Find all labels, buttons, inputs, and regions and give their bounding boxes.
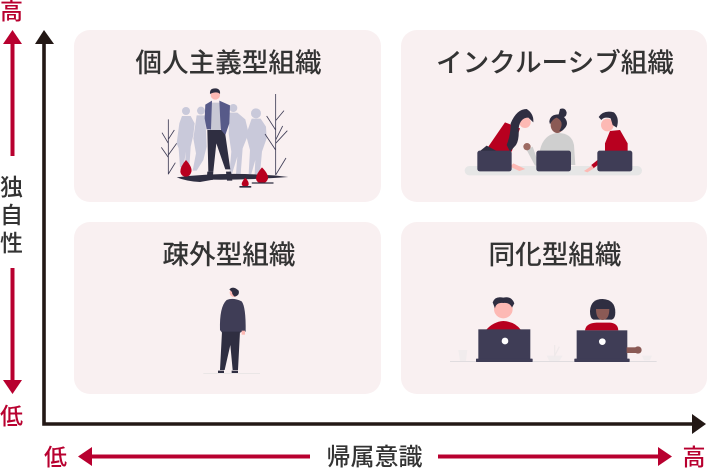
panel: individual-type organization (74, 30, 381, 202)
heading: inclusive: インクルーシブ組織 (436, 48, 674, 78)
illustration: person from behind (203, 288, 260, 374)
label: low: 低 (0, 403, 23, 429)
arrow: left (78, 447, 310, 466)
vertical axis label: uniqueness: 独 (0, 174, 23, 200)
heading: assimilated: 同化型組織 (489, 240, 621, 270)
vertical axis label: uniqueness: 自 (0, 202, 23, 228)
heading: individual type: 個人主義型組織 (135, 48, 322, 78)
arrow: down (3, 268, 22, 394)
vertical axis label: uniqueness: 性 (0, 230, 23, 256)
illustration: person in front of silhouettes (161, 88, 288, 188)
illustration: three people at laptops (465, 108, 642, 175)
heading: alienated: 疎外型組織 (163, 240, 295, 270)
panel: inclusive organization (401, 30, 707, 202)
illustration: two people behind laptops (450, 297, 657, 362)
panel: assimilated organization (401, 222, 707, 394)
horizontal axis label: sense of belonging (44, 444, 706, 469)
arrow: up (3, 30, 22, 156)
panel: alienated organization (74, 222, 381, 394)
arrow: right (438, 447, 672, 466)
vertical axis label: uniqueness (0, 0, 23, 429)
